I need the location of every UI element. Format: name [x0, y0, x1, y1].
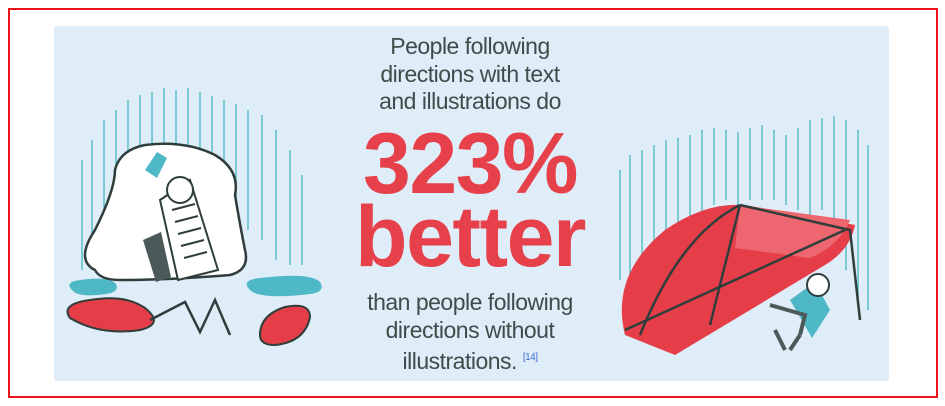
big stat: 323%: [363, 116, 577, 212]
heading text top: directions with text: [380, 60, 560, 86]
heading text top: People following: [390, 33, 550, 59]
bottom text: directions without: [386, 316, 554, 342]
right illustration: tent and relaxed man: [620, 116, 868, 355]
big stat: [355, 116, 586, 285]
bottom text: than people following: [367, 289, 573, 315]
big stat: better: [355, 189, 585, 285]
bottom text: [367, 289, 573, 374]
left illustration: man under newspaper in rain: [68, 88, 322, 345]
bottom text: illustrations. [14]: [402, 348, 538, 374]
heading text top: [379, 33, 561, 114]
heading text top: and illustrations do: [379, 88, 561, 114]
panel: [54, 26, 889, 381]
